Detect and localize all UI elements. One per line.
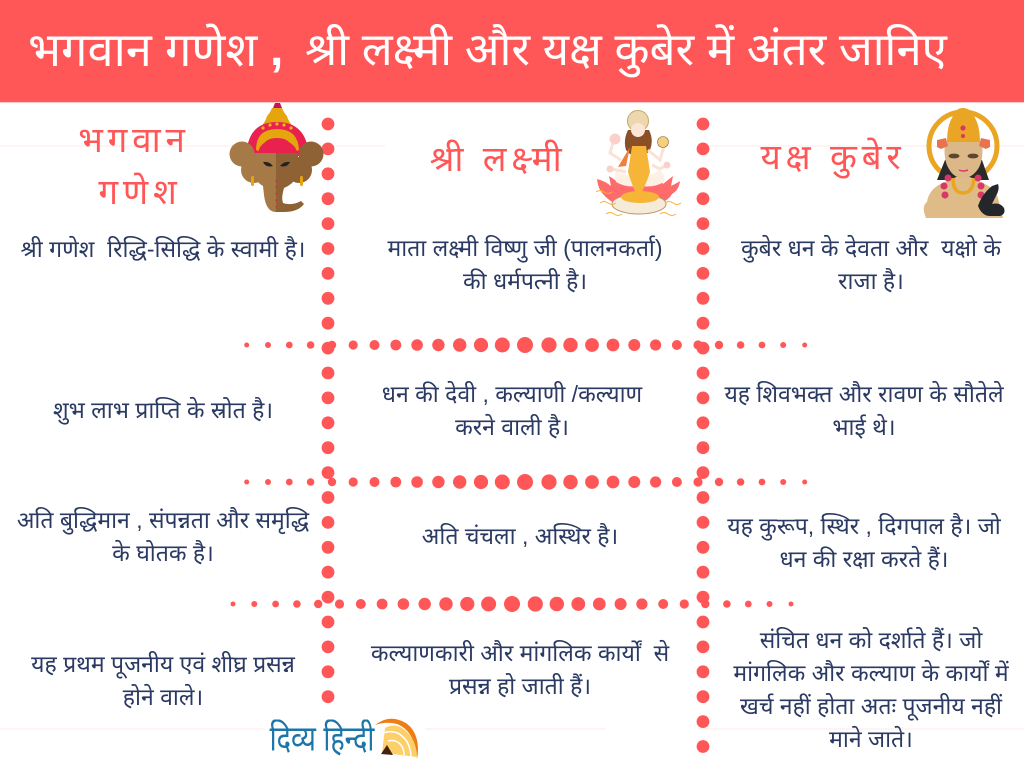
- heading: Lakshmi: श्री लक्ष्मी: [430, 140, 566, 179]
- Ganesha row 2: शुभ लाभ प्राप्ति के स्रोत है।: [53, 397, 273, 423]
- Kubera row 4: माने जाते।: [829, 726, 913, 752]
- logo wordmark: दिव्य हिन्दी: [270, 720, 374, 758]
- Kubera row 2: भाई थे।: [832, 414, 896, 440]
- Ganesha row 3: अति बुद्धिमान , संपन्नता और समृद्धि: [17, 507, 309, 533]
- Kubera row 1: [741, 234, 1002, 294]
- Lakshmi row 4: [370, 640, 670, 699]
- Kubera row 2: यह शिवभक्त और रावण के सौतेले: [724, 381, 1004, 407]
- Lakshmi row 1: की धर्मपत्नी है।: [463, 268, 587, 294]
- horizontal dotted divider 3: [230, 596, 794, 612]
- vertical dotted divider left: [322, 118, 334, 703]
- Ganesha row 4: यह प्रथम पूजनीय एवं शीघ्र प्रसन्न: [31, 651, 295, 677]
- icon: logo pencil fan: [375, 719, 418, 759]
- vertical dotted divider right: [697, 118, 709, 753]
- Kubera row 2: [724, 380, 1004, 440]
- Lakshmi row 2: धन की देवी , कल्याणी /कल्याण: [382, 381, 642, 407]
- Kubera row 4: [733, 626, 1009, 752]
- Kubera row 3: यह कुरूप, स्थिर , दिगपाल है। जो: [727, 513, 1001, 539]
- Kubera row 4: खर्च नहीं होता अतः पूजनीय नहीं: [740, 693, 1002, 719]
- heading: Ganesha: [78, 121, 190, 212]
- heading: Kubera: यक्ष कुबेर: [760, 138, 906, 177]
- Lakshmi row 1: माता लक्ष्मी विष्णु जी (पालनकर्ता): [387, 235, 663, 261]
- horizontal dotted divider 1: [244, 337, 807, 353]
- Ganesha row 4: होने वाले।: [123, 684, 203, 710]
- Ganesha row 4: [31, 651, 296, 710]
- Kubera row 3: [727, 513, 1002, 572]
- Kubera row 1: राजा है।: [838, 268, 904, 294]
- Lakshmi row 1: [387, 235, 663, 294]
- horizontal dotted divider 2: [244, 474, 807, 490]
- Lakshmi row 4: प्रसन्न हो जाती हैं।: [449, 673, 591, 699]
- icon: Kubera bust: [924, 108, 1004, 218]
- icon: Ganesha head: [230, 103, 324, 212]
- heading: Ganesha: भगवान: [78, 121, 190, 160]
- Kubera row 4: संचित धन को दर्शाते हैं। जो: [760, 627, 982, 653]
- Lakshmi row 2: करने वाली है।: [455, 414, 569, 440]
- title banner: भगवान गणेश: [28, 23, 257, 76]
- Ganesha row 3: [17, 507, 310, 566]
- Kubera row 1: कुबेर धन के देवता और यक्षो के: [741, 235, 1001, 261]
- Lakshmi row 2: [382, 380, 642, 440]
- Ganesha row 3: के घोतक है।: [112, 540, 214, 566]
- title banner: [0, 0, 1024, 103]
- title banner: ,: [270, 23, 283, 76]
- heading: Ganesha: गणेश: [98, 173, 182, 212]
- Lakshmi row 3: अति चंचला , अस्थिर है।: [422, 523, 618, 549]
- Lakshmi row 4: कल्याणकारी और मांगलिक कार्यों से: [371, 640, 669, 666]
- title banner: श्री लक्ष्मी और यक्ष कुबेर में अंतर जानिए: [305, 24, 947, 75]
- icon: Lakshmi on lotus: [596, 110, 681, 216]
- Kubera row 4: मांगलिक और कल्याण के कार्यों में: [733, 660, 1009, 686]
- Kubera row 3: धन की रक्षा करते हैं।: [779, 546, 949, 572]
- Ganesha row 1: श्री गणेश रिद्धि-सिद्धि के स्वामी है।: [20, 236, 306, 262]
